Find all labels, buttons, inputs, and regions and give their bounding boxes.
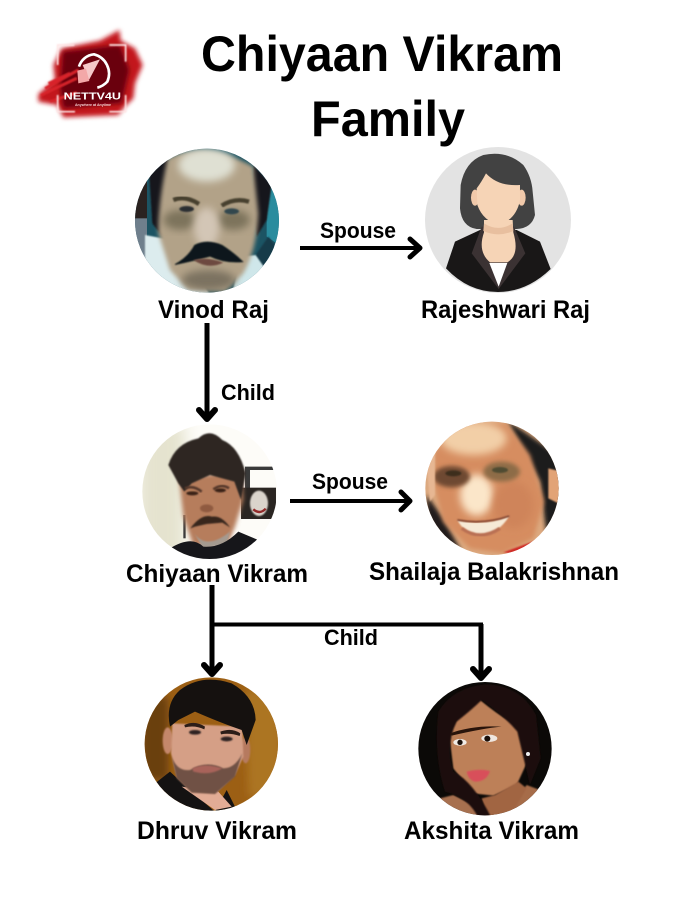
arrows: Chiyaan Vikram to children [204, 585, 489, 678]
portrait: Shailaja Balakrishnan [423, 420, 563, 558]
name: Shailaja Balakrishnan: Shailaja Balakrishnan [369, 558, 619, 586]
portrait: Vinod Raj [132, 147, 285, 297]
arrow: Chiyaan Vikram to Shailaja Balakrishnan (spouse) [290, 469, 410, 510]
arrows: Chiyaan Vikram to children: Child [324, 625, 378, 650]
name: Dhruv Vikram: Dhruv Vikram [137, 817, 297, 845]
arrow: Vinod Raj to Rajeshwari Raj (spouse) [300, 218, 420, 257]
title: Family [311, 91, 465, 147]
name: Chiyaan Vikram: Chiyaan Vikram [126, 560, 308, 588]
title: Chiyaan Vikram [201, 26, 563, 82]
portrait: Rajeshwari Raj (avatar) [425, 147, 571, 293]
logo: NETTV4U: Anywhere at Anytime [75, 103, 111, 107]
name: Akshita Vikram: Akshita Vikram [404, 817, 579, 845]
arrow: Chiyaan Vikram to Shailaja Balakrishnan (spouse): Spouse [312, 469, 388, 494]
arrow: Vinod Raj to Rajeshwari Raj (spouse): Spouse [320, 218, 396, 243]
name: Rajeshwari Raj: Rajeshwari Raj [421, 296, 590, 324]
title [201, 26, 563, 147]
logo: NETTV4U [38, 30, 143, 117]
portrait: Chiyaan Vikram [138, 423, 278, 563]
logo: NETTV4U: NETTV4U [64, 91, 121, 102]
name: Vinod Raj: Vinod Raj [158, 296, 269, 324]
arrow: Vinod Raj to Chiyaan Vikram (child) [199, 323, 275, 419]
portrait: Akshita Vikram [417, 680, 553, 818]
arrow: Vinod Raj to Chiyaan Vikram (child): Child [221, 380, 275, 405]
portrait: Dhruv Vikram [142, 675, 282, 813]
family tree infographic [34, 28, 618, 839]
